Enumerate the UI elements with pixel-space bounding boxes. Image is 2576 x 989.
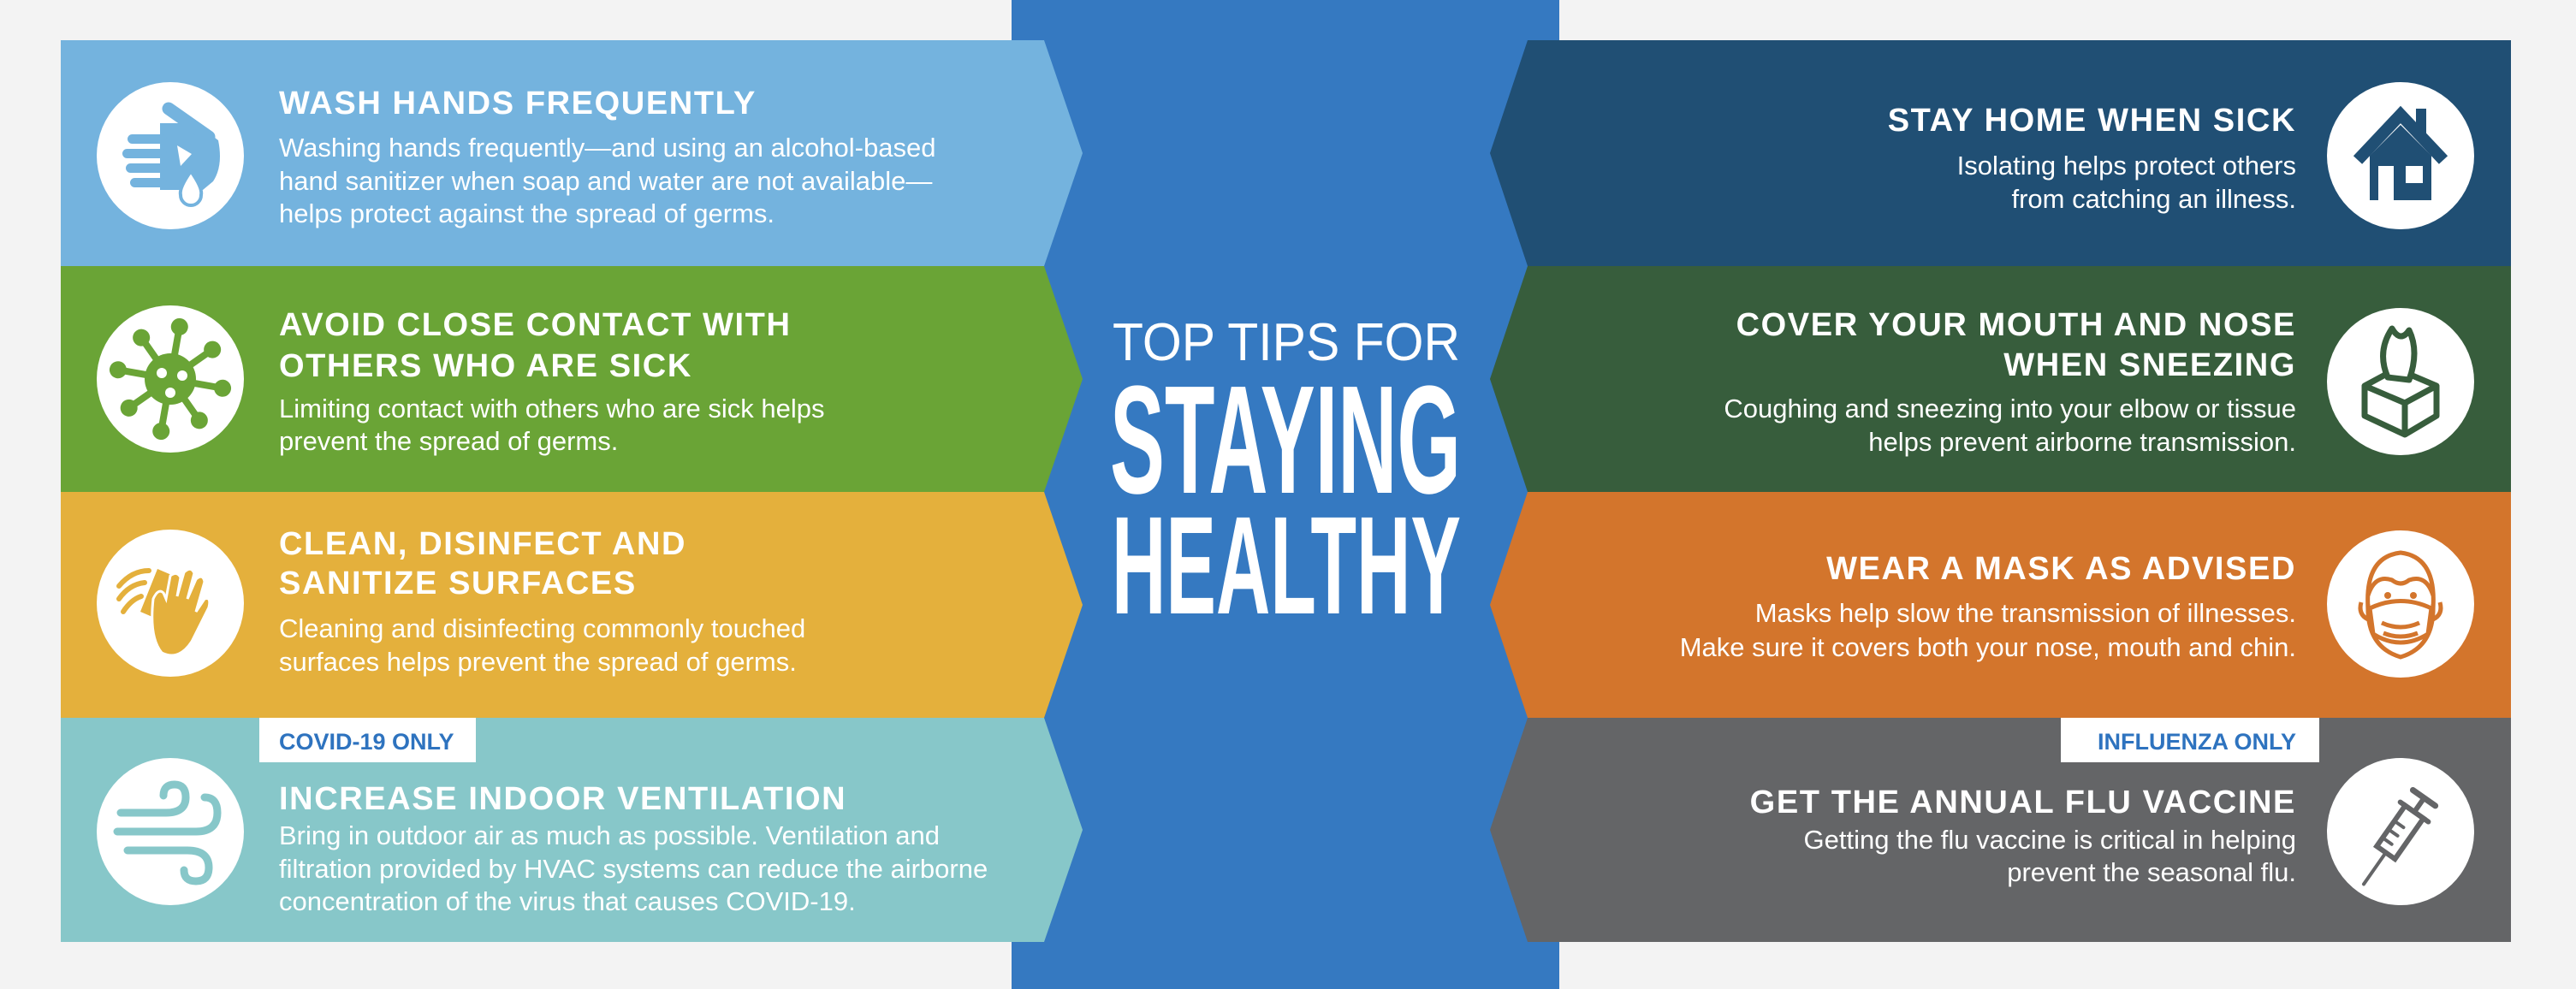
text: stay home: Isolating helps protect others <box>1957 151 2296 181</box>
panel: stay home <box>1490 40 2511 266</box>
icon: house <box>2327 82 2474 229</box>
icon: mask face <box>2327 530 2474 678</box>
panel: cover mouth: helps prevent airborne transmission. <box>1868 427 2296 457</box>
icon: cleaning hand <box>97 530 244 677</box>
text: flu vaccine: Getting the flu vaccine is critical in helping <box>1803 825 2296 855</box>
panel: avoid contact <box>61 266 1083 492</box>
panel: cover mouth: WHEN SNEEZING <box>2003 347 2296 383</box>
title: cover mouth: COVER YOUR MOUTH AND NOSE <box>1736 307 2296 343</box>
text: wear mask: Masks help slow the transmission of illnesses. <box>1755 598 2296 628</box>
panel: clean surfaces: surfaces helps prevent the spread of germs. <box>279 647 797 677</box>
title: clean surfaces: CLEAN, DISINFECT AND <box>279 526 686 562</box>
icon: virus <box>97 305 244 453</box>
panel: ventilation: filtration provided by HVAC systems can reduce the airborne <box>279 854 988 884</box>
center blue column <box>1012 0 1559 989</box>
text: wash hands: Washing hands frequently—and using an alcohol-based <box>279 133 935 163</box>
panel: ventilation: concentration of the virus that causes COVID-19. <box>279 886 856 916</box>
title: top tips for staying healthy <box>1110 313 1461 643</box>
panel: flu vaccine <box>1490 718 2511 942</box>
title: top tips for staying healthy: HEALTHY <box>1112 487 1461 643</box>
panel: clean surfaces: SANITIZE SURFACES <box>279 566 637 601</box>
badge: influenza only <box>2061 718 2319 762</box>
title: wear mask: WEAR A MASK AS ADVISED <box>1826 551 2296 587</box>
panel: avoid contact: prevent the spread of germs. <box>279 426 618 456</box>
panel: wash hands: hand sanitizer when soap and water are not available— <box>279 166 932 196</box>
text: avoid contact: Limiting contact with others who are sick helps <box>279 394 825 423</box>
icon: hand washing <box>97 82 244 229</box>
panel: ventilation <box>61 718 1083 942</box>
badge: covid-19 only: COVID-19 ONLY <box>279 729 454 755</box>
text: clean surfaces: Cleaning and disinfecting commonly touched <box>279 613 805 643</box>
title: top tips for staying healthy: STAYING <box>1110 354 1461 526</box>
title: top tips for staying healthy: TOP TIPS FOR <box>1113 313 1460 372</box>
panel: wear mask <box>1490 492 2511 718</box>
badge: influenza only: INFLUENZA ONLY <box>2098 729 2296 755</box>
panel: flu vaccine: prevent the seasonal flu. <box>2007 857 2296 887</box>
text: cover mouth: Coughing and sneezing into your elbow or tissue <box>1724 394 2296 423</box>
panel: avoid contact: OTHERS WHO ARE SICK <box>279 348 692 384</box>
panel: clean surfaces <box>61 492 1083 718</box>
title: flu vaccine: GET THE ANNUAL FLU VACCINE <box>1750 785 2296 820</box>
icon: wind <box>97 758 244 905</box>
title: wash hands: WASH HANDS FREQUENTLY <box>279 86 757 121</box>
title: avoid contact: AVOID CLOSE CONTACT WITH <box>279 307 792 343</box>
panel: wash hands <box>61 40 1083 266</box>
badge: covid-19 only <box>259 718 476 762</box>
panel: wear mask: Make sure it covers both your nose, mouth and chin. <box>1680 632 2296 662</box>
icon: tissue box <box>2327 308 2474 455</box>
panel: cover mouth <box>1490 266 2511 492</box>
title: ventilation: INCREASE INDOOR VENTILATION <box>279 781 846 817</box>
text: ventilation: Bring in outdoor air as much as possible. Ventilation and <box>279 820 940 850</box>
title: stay home: STAY HOME WHEN SICK <box>1888 103 2296 139</box>
icon: syringe <box>2298 729 2503 934</box>
panel: stay home: from catching an illness. <box>2011 184 2296 214</box>
panel: wash hands: helps protect against the spread of germs. <box>279 198 775 228</box>
